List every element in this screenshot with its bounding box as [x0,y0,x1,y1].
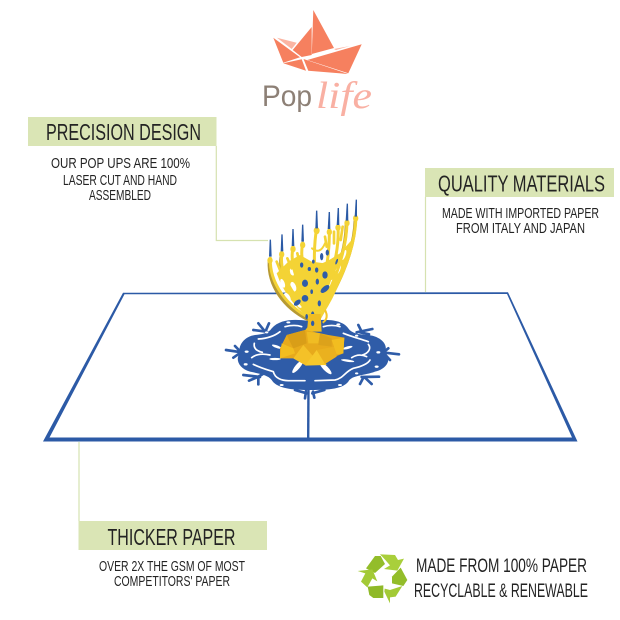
panel: precision design [28,117,216,204]
description: OUR POP UPS ARE 100% [51,155,190,172]
panel: thicker paper [78,521,267,590]
menorah lattice fill [277,240,352,319]
description: COMPETITORS' PAPER [114,573,230,590]
flower cutouts [252,325,370,381]
menorah branches [270,217,356,320]
description [442,205,599,237]
description: OVER 2X THE GSM OF MOST [99,558,245,575]
candles [269,200,357,257]
pop-up card illustration [43,200,578,442]
lattice holes [279,248,347,309]
heading: PRECISION DESIGN [46,119,201,145]
heading: THICKER PAPER [108,524,236,550]
description: ASSEMBLED [89,187,151,204]
blue scroll accents [293,250,339,319]
branch shadow [269,219,355,321]
logo: Poplife paper boat [262,10,372,117]
card fold [307,365,310,438]
base star [280,330,344,366]
menorah stem [304,314,322,332]
connector lines [79,146,426,521]
description [99,558,245,590]
card outline [43,292,578,442]
paper flower [226,320,399,398]
heading banner [78,521,267,550]
icon: recycle arrows [358,554,407,603]
panel: recyclable [358,554,588,603]
leaf tufts [226,323,399,398]
description: LASER CUT AND HAND [63,172,177,189]
menorah [267,200,358,332]
logo wordmark: life: life [316,75,372,117]
flower petals and dots [244,321,380,386]
recycling statement [414,556,588,602]
candle holders [267,215,358,264]
description [51,155,190,204]
heading banner [425,168,614,197]
icon: origami boat [273,10,362,74]
logo wordmark: Pop: Pop [262,80,312,113]
panel: quality materials [425,168,614,237]
heading banner [28,117,216,146]
